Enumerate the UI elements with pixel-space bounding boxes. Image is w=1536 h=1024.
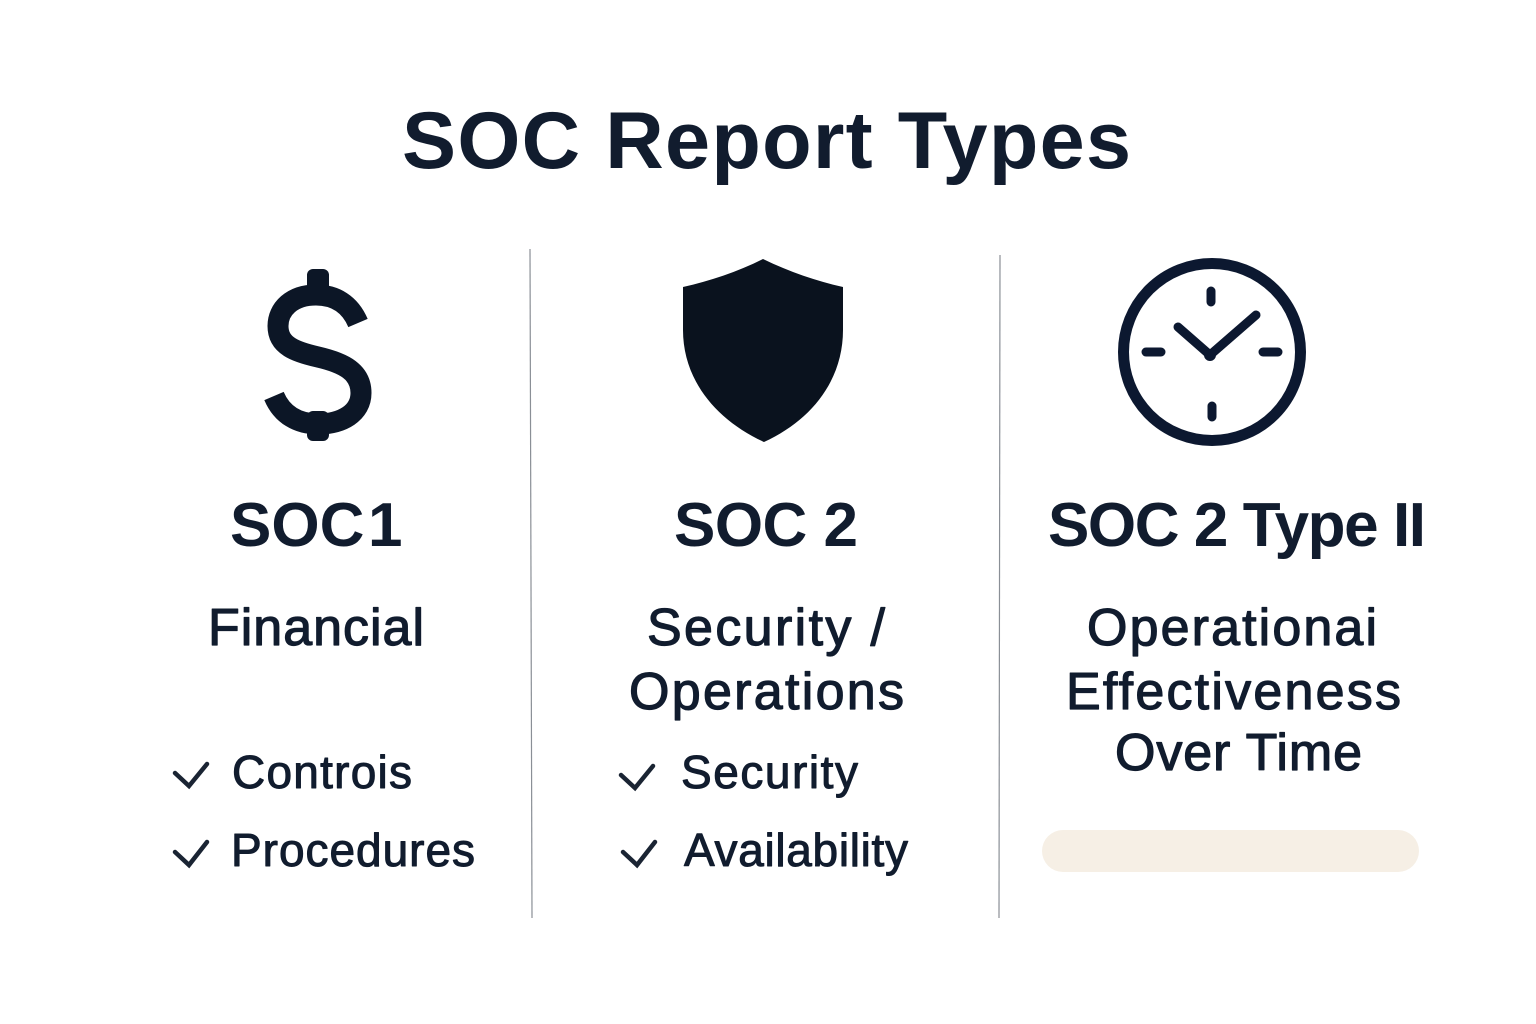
subheading: Security / Operations: Security / <box>647 599 886 657</box>
title: SOC Report Types <box>402 96 1131 186</box>
heading: SOC 1: 1 <box>368 491 402 560</box>
subheading: Security / Operations: Operations <box>629 663 904 721</box>
subheading: Financial: Financial <box>208 599 424 657</box>
icon: clock <box>1124 264 1300 440</box>
check item: Availability: Availability <box>684 824 908 876</box>
check item: Controls: Controis <box>232 746 412 798</box>
subheading: Operational Effectiveness Over Time: Operationai <box>1087 599 1377 657</box>
subheading: Security / Operations <box>629 599 904 721</box>
panel: SOC 2 Type II <box>1042 264 1426 872</box>
subheading: Operational Effectiveness Over Time <box>1066 599 1401 782</box>
subheading: Operational Effectiveness Over Time: Over Time <box>1115 724 1362 782</box>
check item: Security: Security <box>681 746 858 798</box>
panel: SOC 1 <box>175 269 475 876</box>
beige pill <box>1042 830 1419 872</box>
heading: SOC 2 Type II: SOC 2 Type II <box>1048 491 1426 560</box>
subheading: Operational Effectiveness Over Time: Effectiveness <box>1066 663 1401 721</box>
check item: Procedures: Procedures <box>231 824 475 876</box>
heading: SOC 1: SOC <box>230 491 364 560</box>
heading: SOC 2: SOC 2 <box>674 491 858 560</box>
icon: shield <box>683 259 843 442</box>
panel: SOC 2 <box>621 259 908 876</box>
icon: dollar sign <box>274 269 361 441</box>
